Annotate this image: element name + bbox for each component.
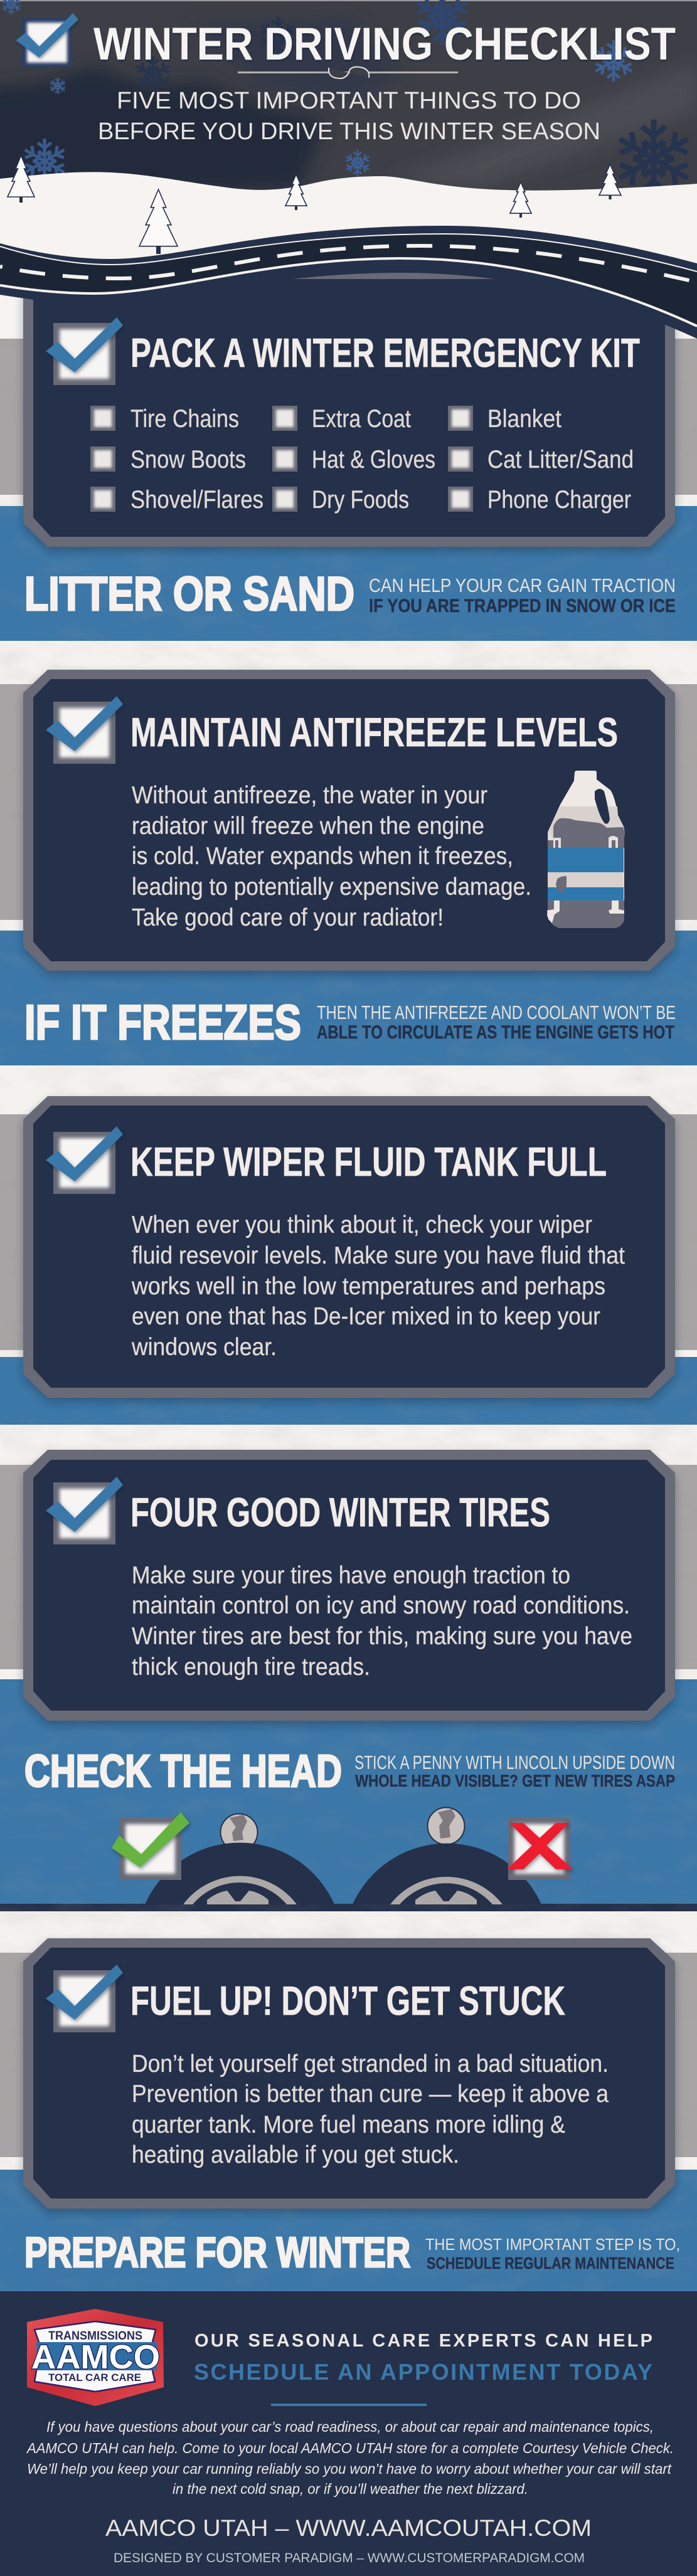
footer paragraph: We’ll help you keep your car running reliably so you won’t have to worry about whether your car will start: [27, 2461, 673, 2477]
icon: left penny: [221, 1813, 257, 1851]
body text: [132, 782, 531, 931]
heading: FOUR GOOD WINTER TIRES: [130, 1489, 550, 1535]
body text: Take good care of your radiator!: [132, 904, 444, 931]
icon: checkbox: [46, 696, 123, 764]
call to action: OUR SEASONAL CARE EXPERTS CAN HELP: [194, 2331, 652, 2351]
website line: AAMCO UTAH – WWW.AAMCOUTAH.COM: [105, 2515, 592, 2541]
body text: Winter tires are best for this, making sure you have: [132, 1623, 632, 1650]
body text: [132, 2051, 609, 2168]
icon: antifreeze jug: [547, 771, 624, 928]
panel: wiper fluid: [23, 1096, 675, 1398]
subtitle: [98, 88, 600, 145]
logo: AAMCO: [27, 2309, 164, 2406]
body text: leading to potentially expensive damage.: [132, 874, 531, 900]
icon: checkbox: [46, 317, 123, 385]
title ornament: [238, 67, 458, 78]
body text: even one that has De-Icer mixed in to keep your: [132, 1303, 600, 1330]
logo: AAMCO: AAMCO: [31, 2338, 160, 2376]
icon: checkbox: [46, 1965, 123, 2032]
checklist: Blanket: [487, 405, 561, 433]
body text: When ever you think about it, check your wiper: [132, 1211, 592, 1238]
panel: fuel up: [23, 1938, 675, 2209]
body text: thick enough tire treads.: [132, 1654, 370, 1681]
snow hill: [0, 172, 697, 339]
call to action: [194, 2331, 652, 2406]
body text: Prevention is better than cure — keep it above a: [132, 2081, 609, 2108]
body text: Make sure your tires have enough traction to: [132, 1562, 570, 1589]
icon: checkbox: [46, 1477, 123, 1544]
body text: [131, 1211, 625, 1361]
callout: check the head: CHECK THE HEAD: [24, 1746, 342, 1797]
body text: radiator will freeze when the engine: [132, 813, 484, 840]
body text: is cold. Water expands when it freezes,: [132, 843, 513, 870]
callout: litter or sand: [24, 567, 676, 621]
body text: works well in the low temperatures and perhaps: [131, 1273, 605, 1300]
logo: AAMCO: TRANSMISSIONS: [48, 2330, 142, 2343]
subtitle: BEFORE YOU DRIVE THIS WINTER SEASON: [98, 119, 600, 145]
road: [0, 226, 697, 339]
subtitle: FIVE MOST IMPORTANT THINGS TO DO: [117, 88, 581, 114]
checklist: Extra Coat: [312, 405, 411, 433]
body text: windows clear.: [131, 1334, 277, 1361]
body text: Without antifreeze, the water in your: [132, 782, 487, 809]
heading: FUEL UP! DON’T GET STUCK: [130, 1978, 565, 2024]
icon: right tire: [353, 1844, 541, 1904]
header: sky and mountains background: [0, 0, 697, 201]
body text: maintain control on icy and snowy road conditions.: [132, 1592, 630, 1619]
icon: checkbox: [46, 1126, 123, 1194]
checklist: Shovel/Flares: [130, 486, 263, 514]
checklist: Tire Chains: [130, 405, 239, 433]
footer paragraph: If you have questions about your car’s road readiness, or about car repair and maintenance topics,: [46, 2419, 654, 2435]
icon: right penny: [428, 1807, 464, 1845]
checklist: Dry Foods: [312, 486, 409, 514]
body text: heating available if you get stuck.: [132, 2141, 459, 2168]
callout: litter or sand: LITTER OR SAND: [24, 567, 354, 621]
logo: AAMCO: TOTAL CAR CARE: [48, 2372, 141, 2383]
panel: antifreeze: [23, 670, 675, 971]
checklist: [90, 405, 634, 514]
body text: quarter tank. More fuel means more idling &: [132, 2111, 565, 2138]
checklist: Hat & Gloves: [312, 446, 435, 473]
panel: emergency kit: [23, 270, 675, 547]
callout: prepare for winter: PREPARE FOR WINTER: [24, 2229, 410, 2276]
footer paragraph: AAMCO UTAH can help. Come to your local AAMCO UTAH store for a complete Courtesy Vehicle Check.: [26, 2440, 674, 2456]
callout: check the head: [24, 1746, 675, 1797]
icon: header checkbox: [16, 13, 78, 68]
callout: if it freezes: [24, 995, 676, 1050]
icon: green check: [112, 1812, 189, 1880]
footer paragraph: [26, 2419, 674, 2497]
designer credit: DESIGNED BY CUSTOMER PARADIGM – WWW.CUSTOMERPARADIGM.COM: [114, 2551, 585, 2565]
body text: [132, 1562, 632, 1681]
body text: fluid resevoir levels. Make sure you have fluid that: [132, 1242, 625, 1269]
body text: Don’t let yourself get stranded in a bad situation.: [132, 2051, 609, 2077]
call to action: SCHEDULE AN APPOINTMENT TODAY: [194, 2359, 652, 2385]
panel: winter tires: [23, 1450, 675, 1721]
illustration: penny in tires: [112, 1807, 573, 1904]
callout: if it freezes: IF IT FREEZES: [24, 995, 301, 1050]
checklist: Snow Boots: [130, 446, 246, 473]
checklist: Phone Charger: [487, 486, 631, 514]
footer paragraph: in the next cold snap, or if you’ll weather the next blizzard.: [173, 2481, 528, 2497]
checklist: Cat Litter/Sand: [487, 446, 634, 473]
icon: red x: [507, 1818, 573, 1880]
trees: [8, 156, 621, 254]
snowflakes: [1, 0, 694, 198]
icon: left tire: [145, 1843, 334, 1904]
